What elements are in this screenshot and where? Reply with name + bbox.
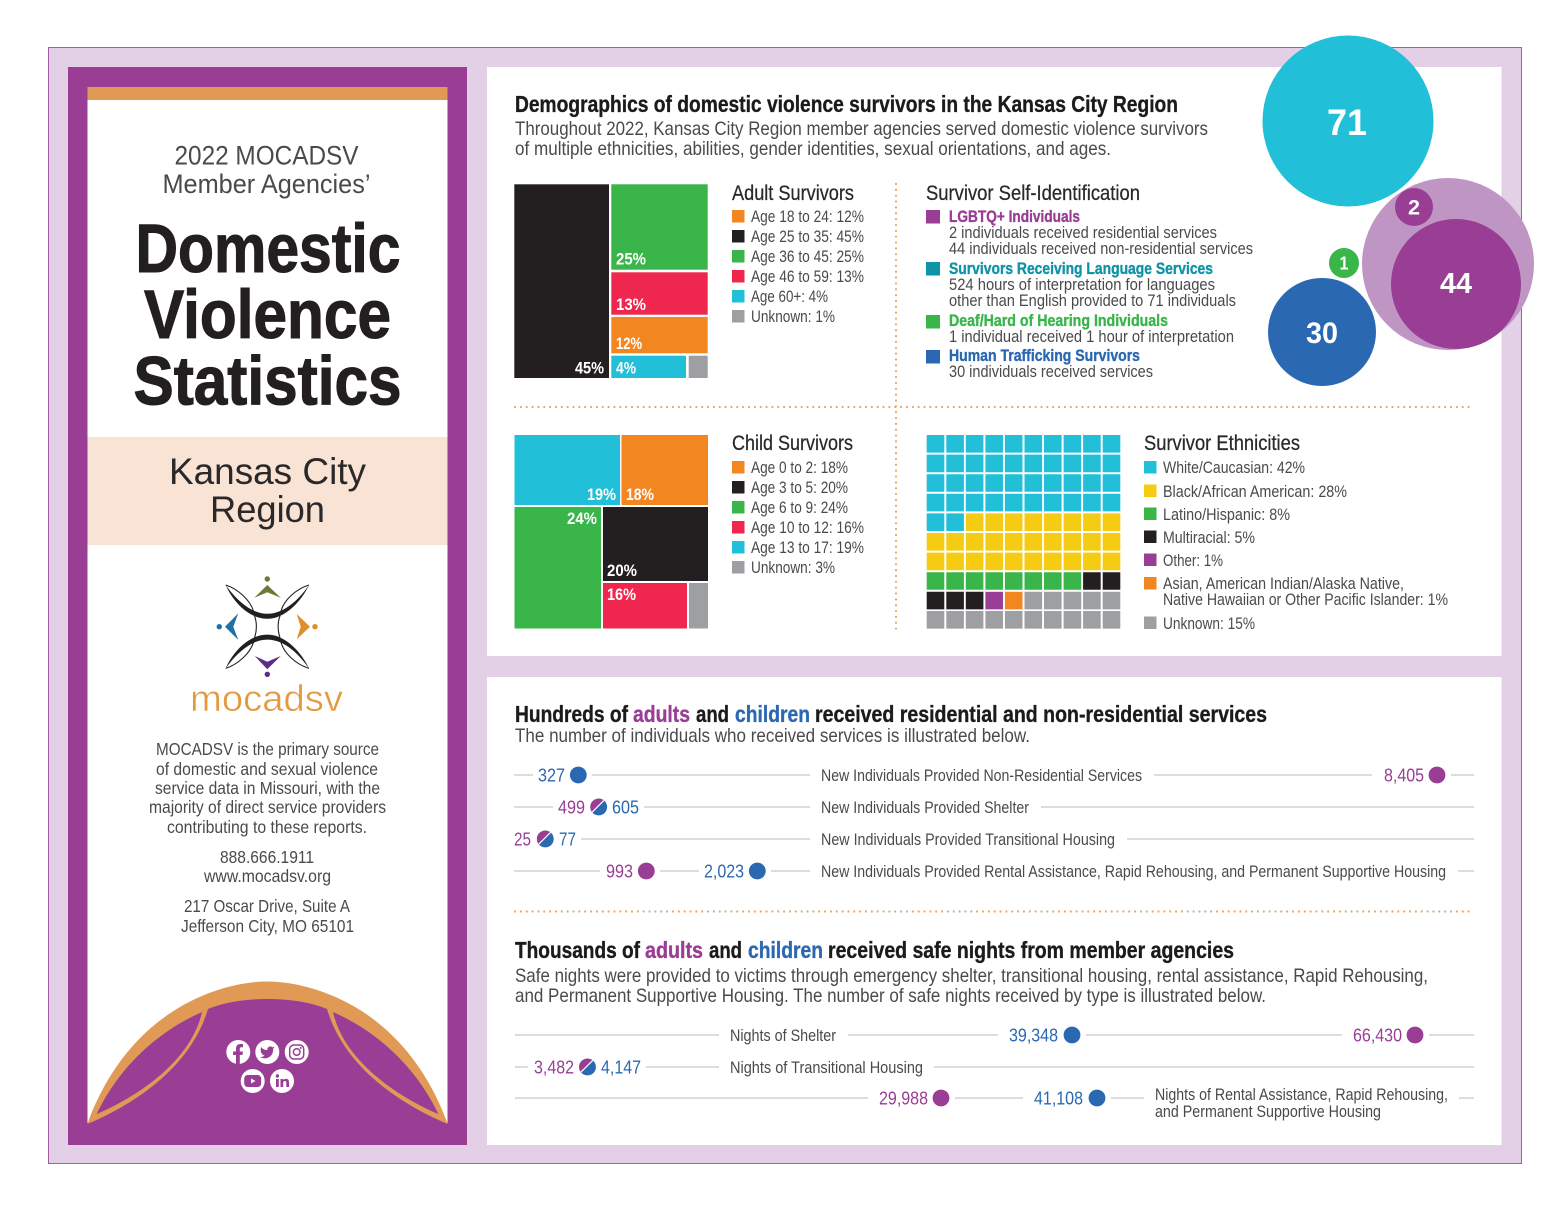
bubble: deaf/hard of hearing 1 [1329, 248, 1359, 278]
social icons [226, 1040, 309, 1093]
services heading: adults [633, 701, 690, 727]
legend: adult survivors: Age 60+: 4% [751, 288, 828, 306]
sidebar kicker: 2022 MOCADSV [174, 140, 358, 170]
waffle: other cell [985, 592, 1003, 609]
legend: survivor ethnicities: Other: 1% [1163, 552, 1223, 570]
treemap: child survivors: 24% [567, 510, 597, 528]
legend: survivor ethnicities: Latino/Hispanic: 8% [1163, 506, 1290, 524]
title: Statistics [134, 342, 402, 420]
dot row: transitional housing [514, 830, 1474, 850]
panel: left sidebar [68, 67, 467, 1145]
region band [88, 437, 448, 545]
region band: Kansas City [169, 451, 366, 492]
dot row: shelter [514, 798, 1474, 818]
legend: child survivors: Unknown: 3% [751, 559, 835, 577]
icon: instagram [285, 1040, 309, 1064]
legend: child survivors: Age 13 to 17: 19% [751, 539, 864, 557]
title [134, 210, 402, 420]
services heading: and [696, 701, 729, 727]
legend: survivor ethnicities: White/Caucasian: 42% [1163, 459, 1305, 477]
about text: contributing to these reports. [167, 817, 367, 837]
legend: adult survivors: Age 25 to 35: 45% [751, 228, 864, 246]
contact details: www.mocadsv.org [203, 866, 331, 886]
dot row: nights of rental assistance: Nights of Rental Assistance, Rapid Rehousing, [1155, 1086, 1448, 1104]
dot row: nights of rental assistance: 29,988 [879, 1088, 928, 1108]
legend: survivor ethnicities: Multiracial: 5% [1163, 529, 1255, 547]
dot row: nights of shelter: 39,348 [1009, 1026, 1058, 1046]
legend: adult survivors: Age 36 to 45: 25% [751, 248, 864, 266]
demographics heading: Demographics of domestic violence survivors in the Kansas City Region [515, 91, 1178, 117]
legend: survivor ethnicities: Native Hawaiian or Other Pacific Islander: 1% [1163, 591, 1448, 609]
waffle: black/african american cells [927, 513, 1120, 570]
dot row: nights of shelter [515, 1026, 1474, 1046]
panel: services and safe nights [487, 677, 1502, 1145]
legend: survivor ethnicities: Survivor Ethnicities [1144, 432, 1300, 455]
sidebar kicker: Member Agencies’ [162, 169, 370, 199]
dot row: nights of transitional housing: Nights of Transitional Housing [730, 1059, 923, 1077]
waffle: latino/hispanic cells [927, 572, 1081, 590]
dot row: nights of shelter: Nights of Shelter [730, 1027, 836, 1045]
dot row: shelter: 499 [558, 798, 585, 818]
bubble: deaf/hard of hearing 1: 1 [1340, 254, 1348, 274]
dot row: non-residential services: 327 [538, 766, 565, 786]
dot row: nights of transitional housing [515, 1058, 1474, 1078]
treemap: adult survivors [514, 184, 708, 378]
treemap: child survivors [514, 435, 708, 628]
safe nights heading: received safe nights from member agencies [828, 937, 1234, 963]
legend: survivor self-identification: Survivors Receiving Language Services [949, 260, 1213, 278]
services heading: Hundreds of [515, 701, 628, 727]
waffle: unknown cells [927, 592, 1120, 629]
bubble: LGBTQ+ residential 2 [1395, 188, 1433, 226]
safe nights heading: and [709, 937, 742, 963]
legend: child survivors: Age 6 to 9: 24% [751, 499, 848, 517]
legend: survivor ethnicities: Asian, American Indian/Alaska Native, [1163, 575, 1404, 593]
dot row: nights of rental assistance: and Permanent Supportive Housing [1155, 1103, 1381, 1121]
waffle chart: survivor ethnicities [927, 435, 1120, 629]
icon: mocadsv logo [190, 576, 344, 719]
legend: survivor self-identification: 2 individuals received residential services [949, 224, 1217, 242]
legend: survivor self-identification: 44 individuals received non-residential services [949, 240, 1253, 258]
dot row: transitional housing: 77 [559, 830, 576, 850]
legend: survivor self-identification [926, 182, 1253, 381]
about text: of domestic and sexual violence [156, 759, 378, 779]
legend: adult survivors: Adult Survivors [732, 182, 854, 205]
legend: child survivors: Age 3 to 5: 20% [751, 479, 848, 497]
safe nights heading: children [748, 937, 823, 963]
dot row: nights of rental assistance: 41,108 [1034, 1088, 1083, 1108]
safe nights heading: adults [645, 937, 703, 963]
bubble: LGBTQ+ non-residential 44 [1362, 178, 1534, 350]
icon: twitter [255, 1040, 279, 1064]
bubble: human trafficking 30: 30 [1306, 317, 1338, 350]
about text: majority of direct service providers [149, 797, 386, 817]
dot row: nights of rental assistance [515, 1086, 1474, 1121]
safe nights intro [515, 965, 1428, 1007]
safe nights heading: Thousands of [515, 937, 640, 963]
title: Violence [144, 276, 391, 353]
treemap: adult survivors: 25% [616, 250, 646, 268]
region band: Region [210, 489, 325, 530]
legend: survivor self-identification: Survivor Self-Identification [926, 182, 1140, 205]
treemap: adult survivors: 13% [616, 296, 646, 314]
contact details [181, 847, 354, 936]
legend: survivor self-identification: 30 individuals received services [949, 363, 1153, 381]
services heading [515, 701, 1267, 727]
treemap: adult survivors: 4% [616, 360, 636, 378]
contact details: 217 Oscar Drive, Suite A [184, 896, 350, 916]
legend: child survivors: Age 10 to 12: 16% [751, 519, 864, 537]
treemap: child survivors: 16% [607, 586, 636, 604]
dot row: rental assistance: 993 [606, 862, 633, 882]
dot row: nights of transitional housing: 3,482 [534, 1058, 574, 1078]
dome decoration [88, 982, 448, 1124]
bubble: language services 71 [1262, 36, 1434, 206]
safe nights intro: Safe nights were provided to victims through emergency shelter, transitional housing, rental assistance, Rapid Rehousing, [515, 965, 1428, 987]
dot row: rental assistance: New Individuals Provided Rental Assistance, Rapid Rehousing, and Permanent Supportive Housing [821, 863, 1446, 881]
waffle: multiracial cells [927, 572, 1120, 609]
dot row: non-residential services [514, 766, 1474, 786]
services heading: received residential and non-residential services [815, 701, 1267, 727]
about text: service data in Missouri, with the [155, 778, 380, 798]
about text [149, 739, 386, 837]
legend: survivor self-identification: 1 individual received 1 hour of interpretation [949, 328, 1234, 346]
demographics intro: of multiple ethnicities, abilities, gender identities, sexual orientations, and ages. [515, 138, 1111, 160]
top accent bar [88, 87, 448, 100]
bubble: human trafficking 30 [1268, 278, 1376, 386]
safe nights intro: and Permanent Supportive Housing. The number of safe nights received by type is illustrated below. [515, 985, 1266, 1007]
dot row: non-residential services: 8,405 [1384, 766, 1424, 786]
bubble: LGBTQ+ residential 2: 2 [1408, 196, 1420, 220]
bubble: LGBTQ+ non-residential 44: 44 [1440, 268, 1472, 300]
legend: child survivors [732, 432, 864, 577]
dot row: rental assistance: 2,023 [704, 862, 744, 882]
legend: survivor self-identification: 524 hours of interpretation for languages [949, 276, 1215, 294]
panel: demographics [487, 67, 1502, 656]
dot row: transitional housing: New Individuals Provided Transitional Housing [821, 831, 1115, 849]
treemap: adult survivors: 12% [616, 335, 642, 353]
dot row: rental assistance [514, 862, 1474, 882]
dot row: non-residential services: New Individuals Provided Non-Residential Services [821, 767, 1142, 785]
dot row: nights of transitional housing: 4,147 [601, 1058, 641, 1078]
treemap: child survivors: 19% [587, 486, 616, 504]
legend: survivor self-identification: Human Trafficking Survivors [949, 347, 1140, 365]
contact details: 888.666.1911 [220, 847, 314, 867]
icon: youtube [241, 1069, 265, 1093]
icon: mocadsv logo: mocadsv [190, 678, 344, 719]
demographics intro: Throughout 2022, Kansas City Region member agencies served domestic violence survivors [515, 118, 1208, 140]
dot row: shelter: 605 [612, 798, 639, 818]
safe nights heading [515, 937, 1234, 963]
legend: child survivors: Child Survivors [732, 432, 853, 455]
legend: adult survivors: Age 46 to 59: 13% [751, 268, 864, 286]
demographics intro [515, 118, 1208, 160]
services subheading: The number of individuals who received services is illustrated below. [515, 725, 1030, 747]
legend: child survivors: Age 0 to 2: 18% [751, 459, 848, 477]
about text: MOCADSV is the primary source [156, 739, 379, 759]
bubble chart: self-identification counts [1262, 36, 1534, 386]
legend: adult survivors: Unknown: 1% [751, 308, 835, 326]
dot row: transitional housing: 25 [514, 830, 531, 850]
dot row: nights of shelter: 66,430 [1353, 1026, 1402, 1046]
sidebar kicker [162, 140, 370, 199]
legend: survivor self-identification: LGBTQ+ Individuals [949, 208, 1080, 226]
bubble: language services 71: 71 [1327, 102, 1367, 143]
legend: survivor ethnicities: Unknown: 15% [1163, 615, 1255, 633]
treemap: child survivors: 18% [626, 486, 654, 504]
dot row: shelter: New Individuals Provided Shelter [821, 799, 1029, 817]
icon: linkedin [270, 1069, 294, 1093]
legend: survivor ethnicities: Black/African American: 28% [1163, 483, 1347, 501]
services heading: children [735, 701, 810, 727]
legend: adult survivors [732, 182, 864, 326]
icon: facebook [226, 1040, 250, 1064]
waffle: asian and pacific islander cell [1005, 592, 1022, 609]
legend: adult survivors: Age 18 to 24: 12% [751, 208, 864, 226]
treemap: adult survivors: 45% [575, 360, 604, 378]
legend: survivor ethnicities [1144, 432, 1448, 633]
legend: survivor self-identification: Deaf/Hard of Hearing Individuals [949, 312, 1168, 330]
legend: survivor self-identification: other than English provided to 71 individuals [949, 292, 1236, 310]
waffle: white/caucasian cells [927, 435, 1120, 531]
contact details: Jefferson City, MO 65101 [181, 916, 354, 936]
treemap: child survivors: 20% [607, 562, 637, 580]
title: Domestic [136, 210, 400, 287]
